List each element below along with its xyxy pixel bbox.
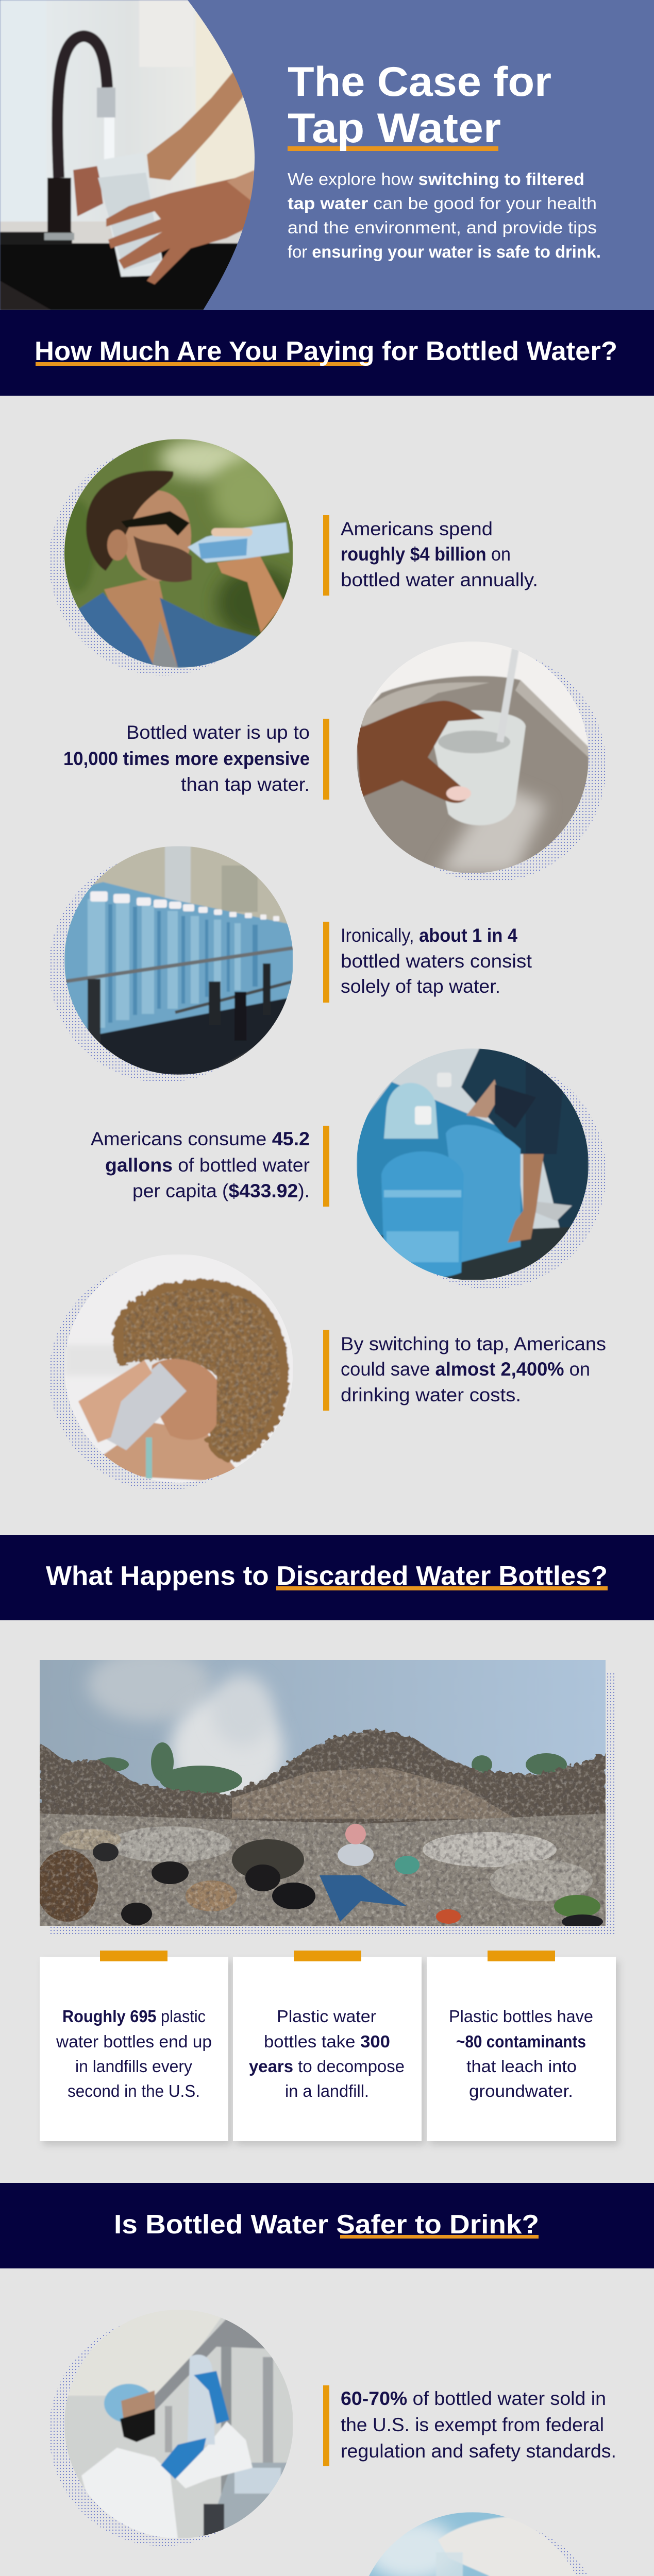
stat text [341, 925, 532, 997]
section header: discarded bottles: What Happens to Discarded Water Bottles? [46, 1561, 608, 1591]
landfill debris texture [40, 1729, 606, 1926]
hero intro text: and the environment, and provide tips [288, 218, 597, 237]
photo: man drinking from bottle [49, 438, 299, 675]
hero title: Tap Water [288, 105, 501, 151]
stat text: gallons of bottled water [105, 1155, 310, 1176]
section header: discarded bottles [0, 1535, 654, 1620]
card 2: years to decompose [233, 1951, 422, 2141]
stat 2: ten thousand times [63, 641, 606, 882]
bags and coloured debris [93, 1824, 603, 1929]
stat 6: exempt from regulation [49, 2310, 616, 2546]
card text: Plastic bottles have [449, 2007, 593, 2026]
photo: lab technician inspecting bottle [49, 2310, 293, 2546]
stat text [341, 1333, 606, 1405]
stat text [341, 2388, 616, 2462]
hero intro text [288, 170, 601, 261]
stat text [341, 518, 538, 590]
photo: gloved hand holding test tube [356, 2512, 606, 2576]
stat text: the U.S. is exempt from federal [341, 2414, 604, 2435]
tape [488, 1951, 555, 1961]
hero intro text: We explore how switching to filtered [288, 170, 584, 189]
accent bar [323, 922, 329, 1003]
card 1: plastic bottles per second [40, 1951, 228, 2141]
photo: woman drinking water [49, 1255, 293, 1490]
stat text: bottled waters consist [341, 951, 532, 972]
card text: years to decompose [249, 2057, 405, 2076]
hero title: The Case for [288, 59, 551, 105]
photo: large water jugs [357, 1048, 606, 1289]
faucet [44, 36, 115, 240]
stat text: Americans spend [341, 518, 493, 539]
stat text [91, 1128, 310, 1201]
stat 5: savings [49, 1255, 606, 1490]
stat text: solely of tap water. [341, 976, 500, 997]
stat text: bottled water annually. [341, 569, 538, 590]
stat text: 60-70% of bottled water sold in [341, 2388, 606, 2409]
stat text: could save almost 2,400% on [341, 1359, 590, 1380]
stat text: per capita ($433.92). [132, 1180, 310, 1201]
photo: landfill [36, 1649, 615, 1934]
stat text: than tap water. [181, 774, 310, 795]
panel: hero [0, 0, 654, 310]
glass [96, 152, 163, 277]
card text [249, 2007, 405, 2100]
stat text: Bottled water is up to [126, 722, 310, 743]
card text: that leach into [466, 2057, 577, 2076]
arm reaching behind [147, 67, 255, 180]
section header: is bottled water safer: Is Bottled Water Safer to Drink? [114, 2210, 539, 2240]
hero photo: tap filling a glass [0, 0, 258, 310]
stat 7: testing frequency [62, 2512, 606, 2576]
card text [449, 2007, 593, 2100]
stat 3: one in four [49, 846, 532, 1082]
tape [100, 1951, 167, 1961]
stat 1: four billion [49, 438, 538, 675]
stat text: Americans consume 45.2 [91, 1128, 310, 1149]
card text: in landfills every [75, 2057, 192, 2076]
accent bar [323, 1330, 329, 1411]
card text: groundwater. [469, 2081, 573, 2100]
hand holding glass [106, 174, 255, 284]
hero title [288, 59, 551, 151]
card 3: contaminants [427, 1951, 616, 2141]
section header: is bottled water safer [0, 2183, 654, 2268]
accent bar [323, 515, 329, 596]
stat 4: gallons per capita [91, 1048, 606, 1289]
photo: bottling line [49, 846, 293, 1082]
stat text: roughly $4 billion on [341, 544, 511, 565]
card text: Roughly 695 plastic [62, 2007, 206, 2026]
hero intro text: for ensuring your water is safe to drink. [288, 242, 601, 261]
card text: bottles take 300 [264, 2032, 390, 2051]
accent bar [323, 1126, 329, 1207]
accent bar [323, 719, 329, 800]
stat text [63, 722, 310, 795]
card text: water bottles end up [56, 2032, 212, 2051]
hero intro text: tap water can be good for your health [288, 194, 597, 213]
photo: hand holding glass under tap [356, 641, 606, 882]
card text: ~80 contaminants [456, 2032, 586, 2051]
accent bar [323, 2385, 329, 2466]
card text [56, 2007, 212, 2100]
card text: in a landfill. [285, 2081, 369, 2100]
stat text: drinking water costs. [341, 1384, 521, 1405]
section header: bottled water cost [0, 310, 654, 396]
tape [294, 1951, 361, 1961]
stat text: By switching to tap, Americans [341, 1333, 606, 1354]
card text: Plastic water [277, 2007, 376, 2026]
card text: second in the U.S. [68, 2081, 200, 2100]
stat text: 10,000 times more expensive [63, 748, 310, 769]
stat text: Ironically, about 1 in 4 [341, 925, 517, 946]
stat text: regulation and safety standards. [341, 2441, 616, 2462]
section header: bottled water cost: How Much Are You Paying for Bottled Water? [35, 336, 617, 366]
